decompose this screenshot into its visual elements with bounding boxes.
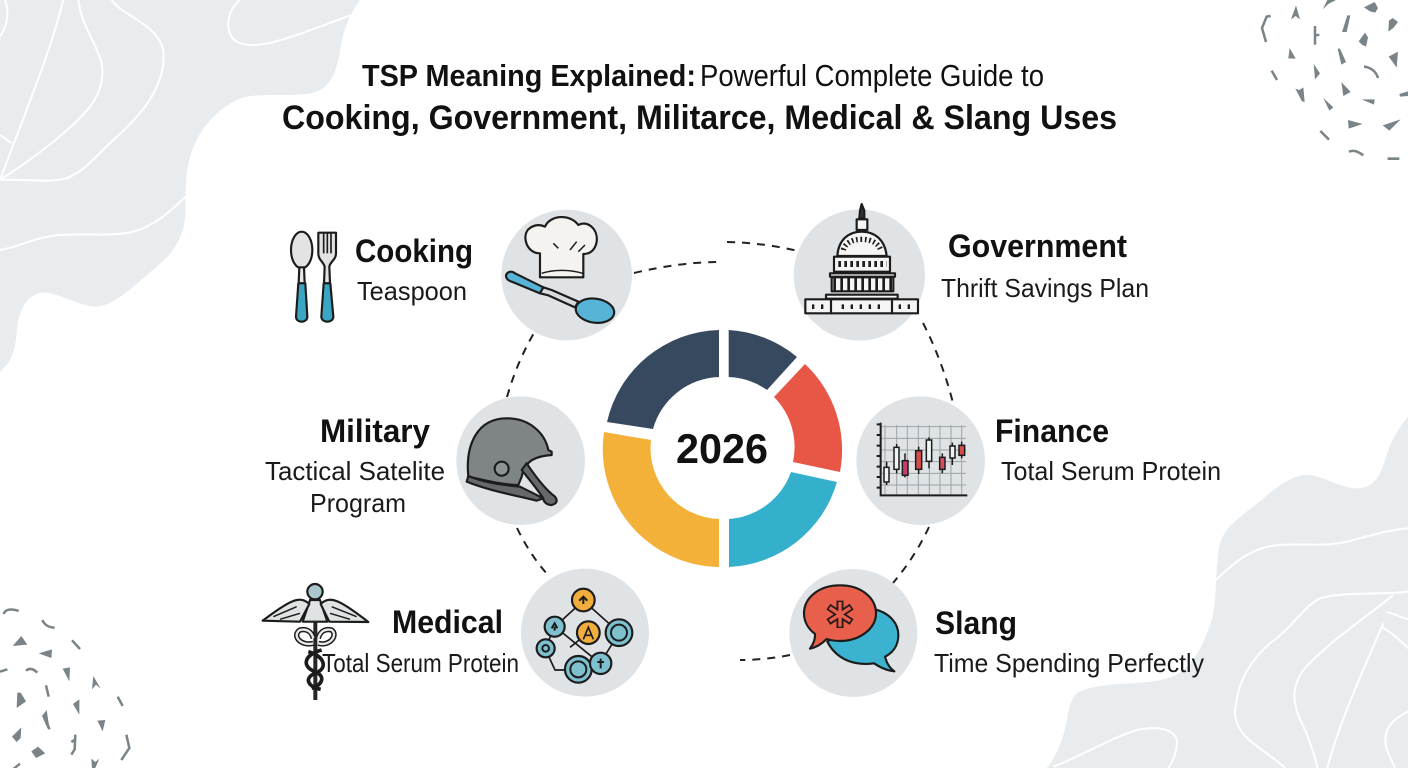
panel: cooking <box>291 210 632 340</box>
description: Total Serum Protein <box>1001 456 1221 486</box>
title: TSP Meaning Explained: <box>362 58 696 93</box>
center year: 2026 <box>676 425 768 472</box>
description: Time Spending Perfectly <box>934 648 1204 678</box>
heading: Cooking <box>355 233 473 269</box>
description: Tactical Satelite <box>265 456 445 486</box>
icon: spoon and fork <box>291 232 336 322</box>
panel: finance <box>856 396 1221 525</box>
panel: slang <box>789 569 1204 697</box>
panel: medical <box>263 569 649 700</box>
panel: military: Program <box>310 488 406 518</box>
donut chart <box>603 330 842 567</box>
title: Cooking, Government, Militarce, Medical & Slang Uses <box>282 99 1117 137</box>
heading: Government <box>948 228 1127 264</box>
background blob: top left <box>0 0 360 372</box>
icon circle: chef hat and spoon <box>501 210 632 340</box>
scattered marks: bottom left <box>0 610 129 768</box>
heading: Finance <box>995 413 1109 449</box>
background blob: bottom right <box>1047 417 1408 768</box>
description: Thrift Savings Plan <box>941 273 1149 303</box>
dashed connectors <box>507 242 953 660</box>
heading: Medical <box>392 604 503 640</box>
description: Total Serum Protein <box>322 648 519 678</box>
heading: Slang <box>935 605 1017 641</box>
description: Teaspoon <box>357 276 467 306</box>
title <box>282 58 1117 137</box>
heading: Military <box>320 413 430 449</box>
title: Powerful Complete Guide to <box>700 58 1044 93</box>
icon circle: helmet <box>456 396 585 525</box>
scattered marks: top right <box>1262 0 1408 160</box>
icon circle: molecular network <box>521 569 649 697</box>
icon circle: candlestick chart <box>856 396 985 525</box>
icon circle: speech bubbles <box>789 569 917 697</box>
panel: military <box>265 396 585 525</box>
panel: government <box>794 204 1149 341</box>
icon: caduceus <box>263 584 368 700</box>
icon circle: capitol building <box>794 204 925 341</box>
